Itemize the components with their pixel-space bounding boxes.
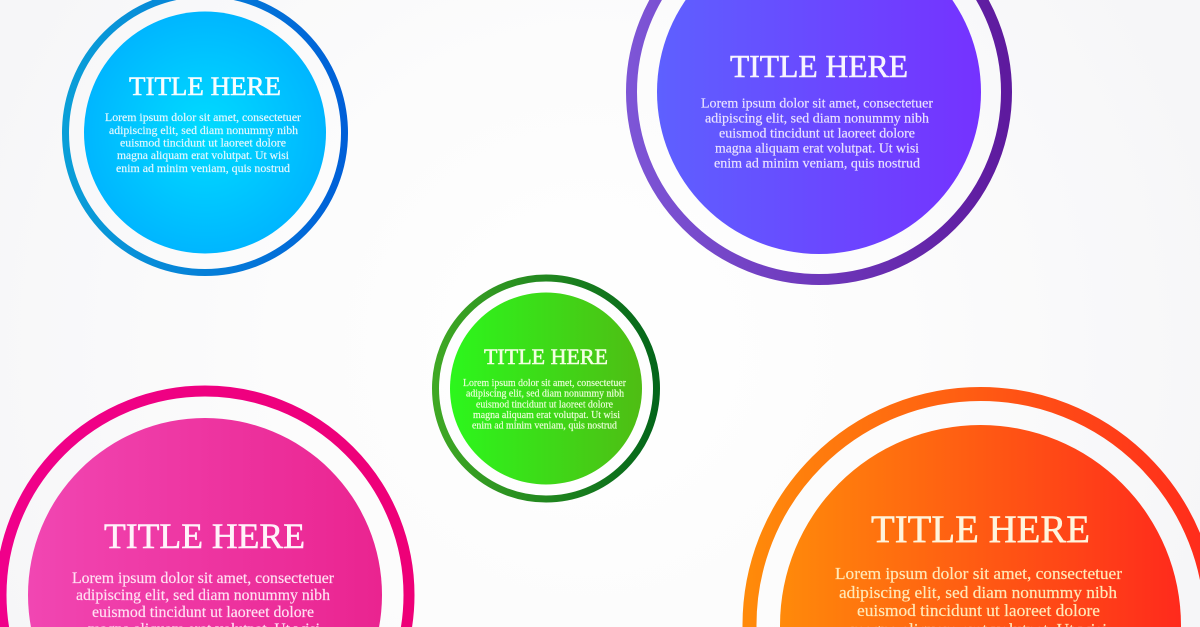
text block: blue circle body: adipiscing elit, sed diam nonummy nibh xyxy=(109,123,298,137)
heading: orange circle title: TITLE HERE xyxy=(871,508,1090,551)
text block: pink circle body: Lorem ipsum dolor sit amet, consectetuer xyxy=(72,570,335,587)
text block: purple circle body: Lorem ipsum dolor sit amet, consectetuer xyxy=(701,96,933,112)
panel: purple circle, top right xyxy=(632,0,1006,280)
text block: pink circle body xyxy=(72,570,335,627)
text block: green circle body: magna aliquam erat volutpat. Ut wisi xyxy=(473,410,620,421)
text block: purple circle body: euismod tincidunt ut laoreet dolore xyxy=(719,126,915,142)
text block: green circle body: adipiscing elit, sed diam nonummy nibh xyxy=(466,389,624,400)
text block: green circle body: enim ad minim veniam, quis nostrud xyxy=(472,421,617,432)
text block: orange circle body xyxy=(835,564,1122,627)
text block: purple circle body: enim ad minim veniam, quis nostrud xyxy=(714,156,920,172)
text block: orange circle body: euismod tincidunt ut laoreet dolore xyxy=(857,601,1100,620)
heading: purple circle title: TITLE HERE xyxy=(730,48,908,84)
heading: green circle title: TITLE HERE xyxy=(484,344,608,369)
panel: orange circle, bottom right xyxy=(750,394,1200,627)
text block: pink circle body: adipiscing elit, sed diam nonummy nibh xyxy=(76,587,330,604)
text block: green circle body: euismod tincidunt ut laoreet dolore xyxy=(476,399,614,410)
text block: purple circle body: magna aliquam erat volutpat. Ut wisi xyxy=(715,142,919,156)
text block: green circle body: Lorem ipsum dolor sit amet, consectetuer xyxy=(463,378,627,389)
text block: purple circle body: adipiscing elit, sed diam nonummy nibh xyxy=(705,112,929,126)
heading: blue circle title: TITLE HERE xyxy=(129,71,281,101)
panel: pink circle, bottom left xyxy=(1,391,409,627)
text block: blue circle body: Lorem ipsum dolor sit amet, consectetuer xyxy=(105,110,301,124)
text block: blue circle body: euismod tincidunt ut laoreet dolore xyxy=(120,136,286,150)
text block: blue circle body: magna aliquam erat volutpat. Ut wisi xyxy=(117,148,290,162)
text block: orange circle body: adipiscing elit, sed diam nonummy nibh xyxy=(839,583,1117,602)
text block: green circle body xyxy=(463,378,627,432)
heading: pink circle title: TITLE HERE xyxy=(104,516,305,556)
text block: pink circle body: euismod tincidunt ut laoreet dolore xyxy=(92,604,314,621)
panel: green circle, center xyxy=(436,278,656,499)
text block: orange circle body: Lorem ipsum dolor sit amet, consectetuer xyxy=(835,564,1122,583)
text block: blue circle body: enim ad minim veniam, quis nostrud xyxy=(116,161,290,175)
text block: purple circle body xyxy=(701,96,933,172)
panel: blue circle, top left xyxy=(66,0,344,272)
text block: blue circle body xyxy=(105,110,301,175)
